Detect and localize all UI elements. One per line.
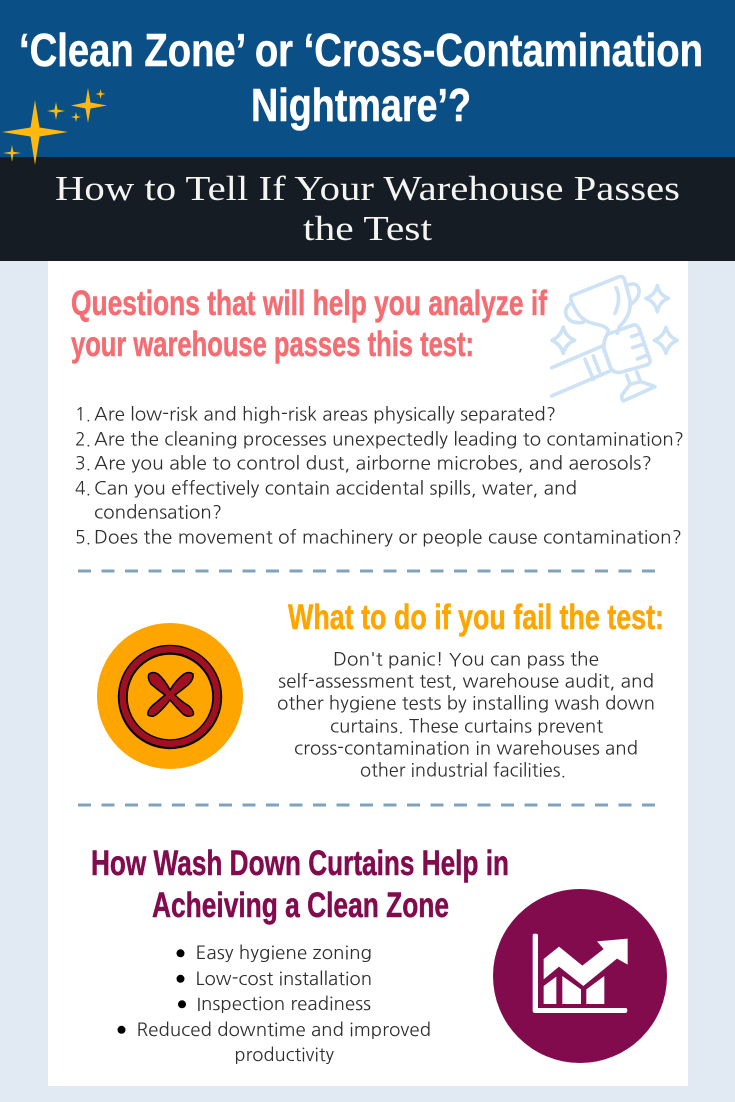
icon: purple circle with growth chart xyxy=(493,889,667,1063)
icon: trophy in fist xyxy=(552,276,677,401)
paragraph: advice: Don't panic! You can pass the xyxy=(333,651,599,669)
paragraph: advice: self-assessment test, warehouse audit, and xyxy=(278,673,654,691)
bullet list of benefits: Easy hygiene zoning xyxy=(196,944,372,962)
title banner: Nightmare’? xyxy=(251,79,471,131)
numbered list of questions: 5. xyxy=(75,529,91,547)
numbered list of questions: condensation? xyxy=(94,504,222,522)
numbered list of questions: 1. xyxy=(75,406,91,424)
subtitle banner: the Test xyxy=(303,209,432,248)
numbered list of questions: Are low-risk and high-risk areas physically separated? xyxy=(94,406,556,424)
heading: questions xyxy=(71,284,547,364)
icon: sparkling stars xyxy=(2,88,107,165)
heading: how curtains help: Acheiving a Clean Zone xyxy=(152,886,449,925)
white content panel xyxy=(48,261,688,1086)
numbered list of questions: 3. xyxy=(75,455,91,473)
numbered list of questions: Can you effectively contain accidental spills, water, and xyxy=(94,480,577,498)
bullet list of benefits: Low-cost installation xyxy=(196,970,372,988)
heading: questions: Questions that will help you analyze if xyxy=(71,284,547,323)
paragraph: advice xyxy=(277,651,655,780)
icon: orange circle with cross xyxy=(97,623,243,769)
heading: how curtains help: How Wash Down Curtains Help in xyxy=(91,844,509,883)
numbered list of questions: 4. xyxy=(75,480,91,498)
heading: how curtains help xyxy=(91,844,509,925)
bullet list of benefits: Inspection readiness xyxy=(196,995,371,1013)
numbered list of questions: Are the cleaning processes unexpectedly leading to contamination? xyxy=(94,431,684,449)
numbered list of questions: 2. xyxy=(75,431,91,449)
paragraph: advice: curtains. These curtains prevent xyxy=(330,718,604,736)
bullet list of benefits xyxy=(118,944,431,1064)
subtitle banner xyxy=(0,157,735,261)
subtitle banner: How to Tell If Your Warehouse Passes xyxy=(55,169,680,208)
numbered list of questions: Does the movement of machinery or people cause contamination? xyxy=(94,529,682,547)
bullet list of benefits: Reduced downtime and improved xyxy=(136,1021,431,1039)
title banner xyxy=(0,0,735,157)
paragraph: advice: other industrial facilities. xyxy=(360,762,566,780)
bullet list of benefits: productivity xyxy=(234,1046,334,1064)
paragraph: advice: other hygiene tests by installing wash down xyxy=(277,695,655,713)
paragraph: advice: cross-contamination in warehouses and xyxy=(294,740,638,758)
numbered list of questions: Are you able to control dust, airborne microbes, and aerosols? xyxy=(94,455,652,473)
heading: questions: your warehouse passes this test: xyxy=(71,325,474,364)
numbered list of questions xyxy=(75,406,684,547)
